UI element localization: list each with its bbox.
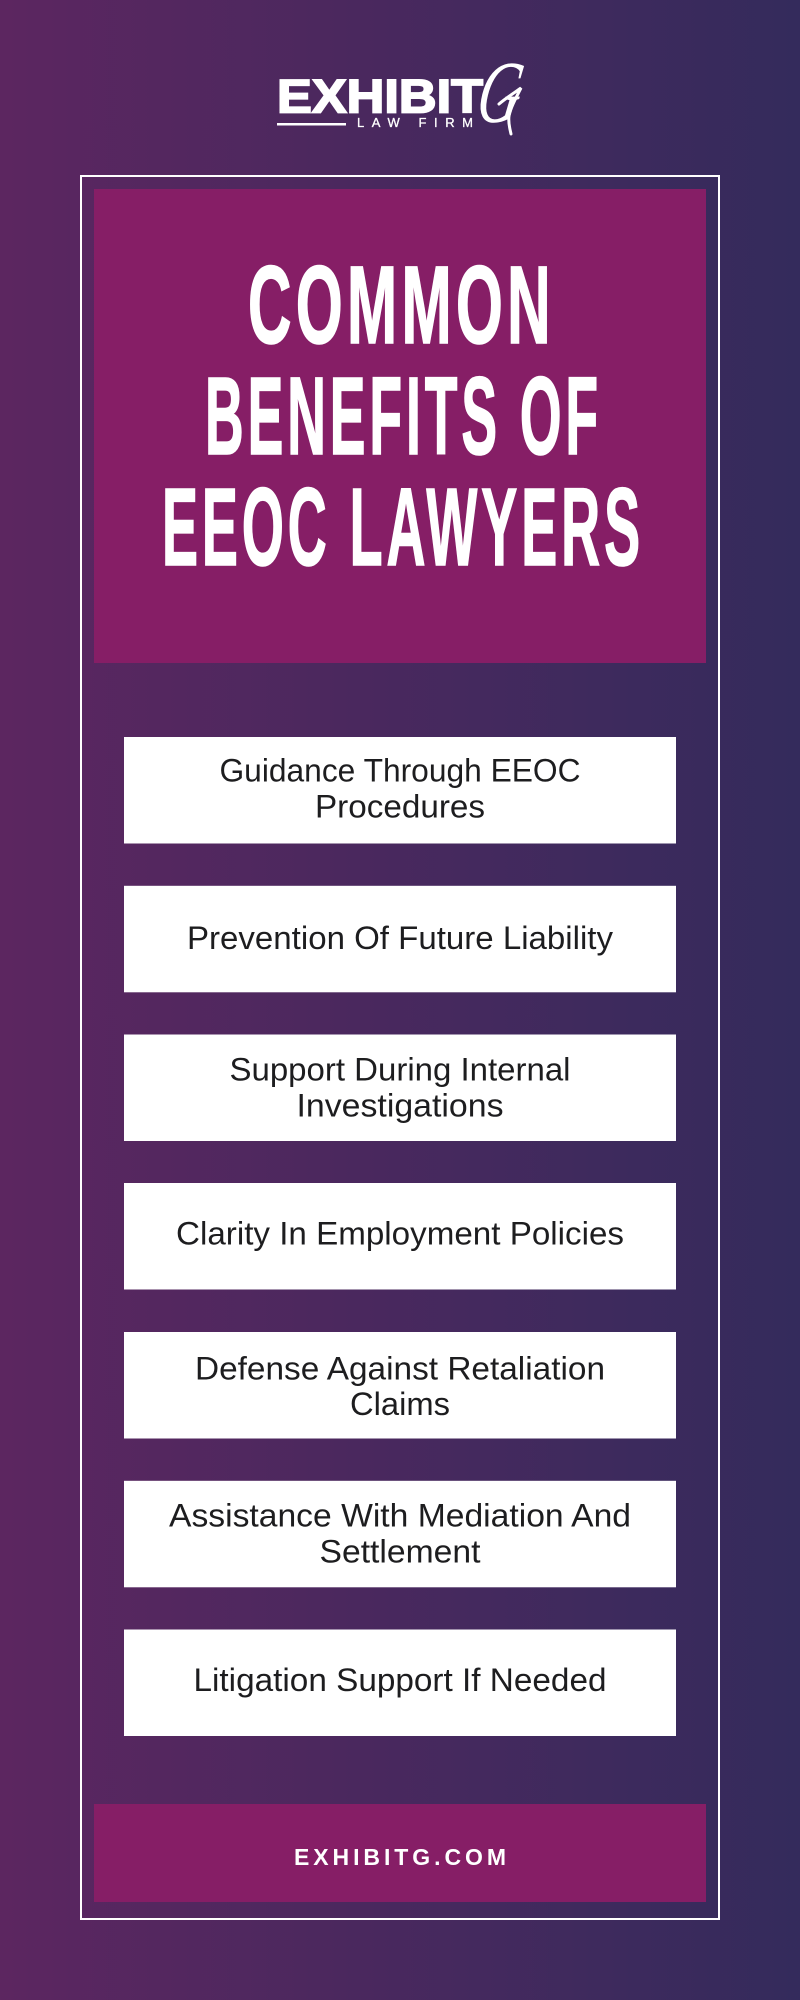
title panel (94, 189, 706, 663)
card: Guidance Through EEOC Procedures (124, 737, 676, 844)
card: Assistance With Mediation And Settlement (124, 1481, 676, 1587)
card: Support During Internal Investigations (124, 1034, 676, 1141)
card: Defense Against Retaliation Claims: Claims (350, 1386, 450, 1422)
card: Guidance Through EEOC Procedures: Guidance Through EEOC (220, 752, 580, 788)
card: Defense Against Retaliation Claims: Defense Against Retaliation (195, 1350, 605, 1386)
card: Defense Against Retaliation Claims (124, 1332, 676, 1438)
logo: Exhibit G Law Firm: LAW FIRM (357, 115, 473, 130)
card: Litigation Support If Needed (124, 1630, 676, 1736)
outer white frame (81, 176, 719, 1919)
card: Clarity In Employment Policies: Clarity In Employment Policies (176, 1216, 624, 1252)
title heading: COMMON (248, 244, 555, 367)
card: Support During Internal Investigations: Investigations (296, 1088, 504, 1124)
card: Assistance With Mediation And Settlement: Assistance With Mediation And (169, 1498, 631, 1534)
card: Clarity In Employment Policies (124, 1183, 676, 1290)
card: Litigation Support If Needed: Litigation Support If Needed (194, 1662, 606, 1698)
footer bar (94, 1804, 706, 1902)
logo: Exhibit G Law Firm (277, 44, 530, 142)
footer website text: EXHIBITG.COM (294, 1844, 506, 1870)
card: Support During Internal Investigations: Support During Internal (230, 1052, 570, 1088)
card: Prevention Of Future Liability: Prevention Of Future Liability (187, 920, 613, 956)
title heading (162, 244, 644, 589)
card: Prevention Of Future Liability (124, 886, 676, 992)
card: Assistance With Mediation And Settlement: Settlement (320, 1534, 481, 1570)
logo: Exhibit G Law Firm: G (471, 44, 530, 142)
card: Guidance Through EEOC Procedures: Procedures (315, 788, 485, 824)
logo: Exhibit G Law Firm: EXHIBIT (277, 70, 483, 122)
